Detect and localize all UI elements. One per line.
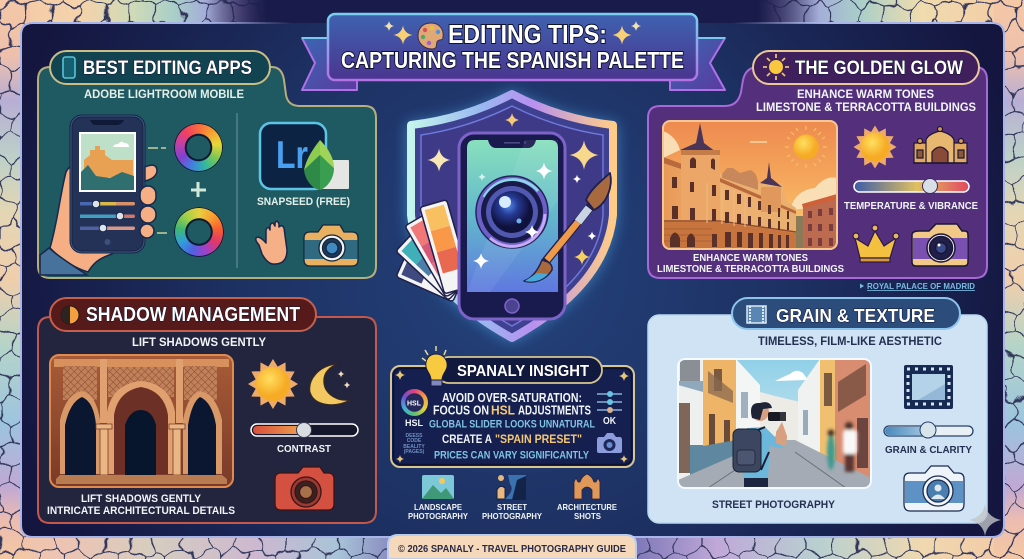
photo: royal palace: [663, 121, 837, 249]
panel: spanaly insight: [391, 346, 634, 467]
panel: best editing apps: [38, 51, 376, 278]
icon: purple camera: [912, 224, 968, 266]
icon: camera: [304, 225, 358, 266]
icon: hsl ring: [401, 389, 428, 416]
tiny note: (PAGES): [404, 449, 425, 455]
shield sparkles: [428, 113, 598, 265]
heading pill: grain and texture: GRAIN & TEXTURE: [776, 306, 935, 326]
icon group: street photography: STREET: [497, 502, 528, 512]
heading pill: grain and texture: [732, 298, 960, 329]
icon: small camera: [597, 433, 622, 453]
insight text: HSL: [491, 402, 515, 418]
photo thumbnail: [79, 132, 136, 192]
icon group: landscape photography: [408, 475, 468, 521]
hero phone: [459, 133, 565, 319]
icon group: street photography: PHOTOGRAPHY: [482, 511, 542, 521]
icon group: architecture shots: [557, 474, 617, 521]
heading pill: golden glow: [753, 51, 979, 84]
corner sparkles: [395, 370, 629, 463]
subheading: LIFT SHADOWS GENTLY: [132, 335, 266, 349]
heading pill: golden glow: THE GOLDEN GLOW: [795, 58, 963, 79]
icon group: landscape photography: LANDSCAPE: [414, 502, 462, 512]
subheading: ADOBE LIGHTROOM MOBILE: [84, 89, 244, 101]
photo caption: INTRICATE ARCHITECTURAL DETAILS: [47, 505, 235, 517]
plus sign: [191, 182, 206, 197]
slider: grain: [884, 422, 973, 438]
phone in hand illustration: [40, 116, 157, 275]
icon: sun: [854, 126, 896, 168]
slider label: GRAIN & CLARITY: [885, 445, 972, 456]
paint brush: [524, 173, 611, 282]
photo caption: [657, 252, 844, 275]
slider label: TEMPERATURE & VIBRANCE: [844, 201, 978, 212]
icon: film frame: [904, 365, 953, 409]
subheading lines: LIMESTONE & TERRACOTTA BUILDINGS: [756, 100, 976, 114]
connector dashes: [148, 148, 168, 233]
photo: moorish arches: [50, 355, 233, 487]
heading pill: insight: [436, 357, 602, 383]
footer badge: [388, 535, 636, 559]
title sparkles: [384, 21, 641, 44]
source link: royal palace of madrid: ROYAL PALACE OF MADRID: [867, 281, 975, 291]
insight text: GLOBAL SLIDER LOOKS UNNATURAL: [429, 418, 595, 430]
icon: crescent moon: [310, 364, 350, 405]
icon group: street photography: [482, 475, 542, 521]
photo caption: LIMESTONE & TERRACOTTA BUILDINGS: [657, 263, 844, 275]
icon: light bulb: [422, 346, 447, 386]
edit sliders: [80, 200, 135, 245]
snapseed label: SNAPSEED (FREE): [257, 196, 350, 208]
heading pill: best editing apps: BEST EDITING APPS: [83, 58, 252, 79]
central shield emblem: [396, 91, 617, 342]
icon: palace: [913, 126, 968, 163]
tiny note: BEALITY: [403, 444, 425, 450]
icon group: architecture shots: SHOTS: [574, 511, 601, 521]
panel: grain and texture: [648, 298, 987, 523]
slider label: CONTRAST: [277, 443, 332, 455]
app icons: lightroom and snapseed: Lr: [276, 134, 308, 177]
tiny note: DEESS: [406, 433, 423, 439]
ok label: OK: [603, 416, 617, 427]
footer badge: © 2026 SPANALY - TRAVEL PHOTOGRAPHY GUIDE: [398, 544, 626, 555]
icon: blue camera: [904, 466, 964, 511]
colour wheel top: [174, 123, 223, 172]
icon: red camera: [275, 467, 334, 510]
colour wheel bottom: [174, 207, 224, 257]
tiny note: [403, 433, 425, 455]
subheading lines: ENHANCE WARM TONES: [797, 87, 934, 101]
heading pill: shadow management: [50, 298, 316, 331]
insight text: [429, 390, 595, 462]
panel: the golden glow: [648, 51, 987, 278]
title text: EDITING TIPS:: [448, 19, 607, 49]
icon: sliders: [597, 391, 622, 413]
icon: sun: [248, 359, 298, 409]
insight text: FOCUS ON: [433, 402, 489, 418]
hsl label: HSL: [405, 418, 424, 428]
heading pill: shadow management: SHADOW MANAGEMENT: [86, 304, 300, 326]
title text: [341, 19, 684, 73]
photo caption: ENHANCE WARM TONES: [693, 252, 808, 264]
insight text: PRICES CAN VARY SIGNIFICANTLY: [434, 450, 590, 462]
photo caption: LIFT SHADOWS GENTLY: [81, 493, 202, 505]
fingers: [140, 165, 157, 238]
subheading lines: [756, 87, 976, 114]
subheading: TIMELESS, FILM-LIKE AESTHETIC: [758, 334, 942, 348]
insight text: "SPAIN PRESET": [495, 432, 582, 446]
icon: hand: [256, 221, 287, 264]
insight text: ADJUSTMENTS: [518, 402, 591, 418]
icon group: landscape photography: PHOTOGRAPHY: [408, 511, 468, 521]
heading pill: best editing apps: [50, 51, 270, 84]
insight text: CREATE A: [442, 432, 492, 446]
title text: CAPTURING THE SPANISH PALETTE: [341, 47, 684, 73]
divider: [236, 113, 238, 268]
palette icon: [418, 23, 443, 49]
slider: contrast: [251, 422, 358, 438]
colour swatch fan: [396, 200, 471, 302]
app icons: lightroom and snapseed: [260, 123, 349, 190]
tiny note: CODE: [407, 438, 422, 444]
icon group: architecture shots: ARCHITECTURE: [557, 502, 617, 512]
icon: crown: [853, 225, 899, 262]
camera lens: [476, 176, 548, 248]
decorative corner sparkle: [969, 504, 1001, 536]
hsl icon text: HSL: [407, 400, 422, 408]
photo caption: STREET PHOTOGRAPHY: [712, 499, 836, 511]
panel: shadow management: [38, 298, 376, 523]
slider: temperature: [854, 178, 969, 194]
heading pill: insight: SPANALY INSIGHT: [457, 363, 589, 380]
photo caption: [47, 493, 235, 517]
title banner: [302, 14, 725, 90]
screen sparkles: [473, 162, 552, 269]
insight text: AVOID OVER-SATURATION:: [442, 390, 582, 405]
photo: street photographer: [678, 359, 871, 488]
